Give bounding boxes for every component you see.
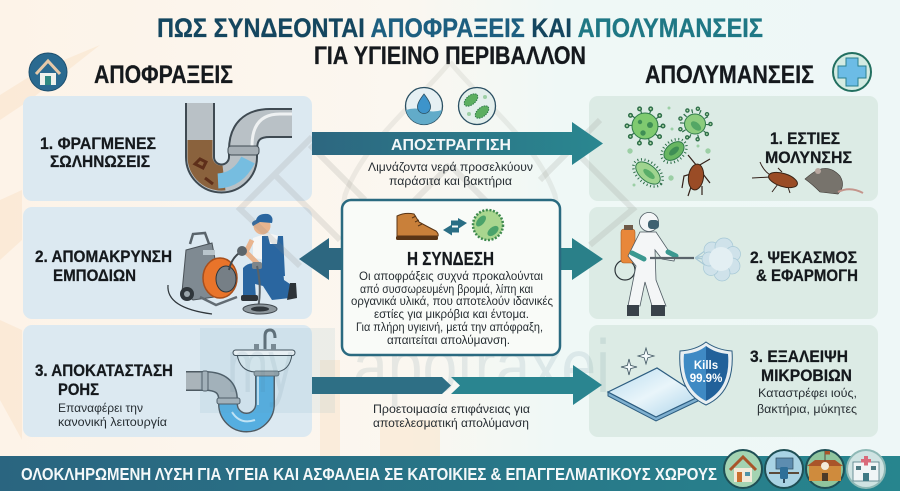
icon: microbe: [473, 210, 503, 240]
callout text: Για πλήρη υγιεινή, μετά την απόφραξη,: [356, 320, 543, 334]
icon: home: [724, 450, 762, 488]
icon: bacteria dish: [458, 88, 496, 124]
preparation caption: αποτελεσματική απολύμανση: [373, 416, 529, 430]
panel text: obstacle removal: 2. ΑΠΟΜΑΚΡΥΝΣΗ: [35, 247, 172, 266]
arrow: drainage: [312, 122, 603, 165]
callout text: εστίες για μικρόβια και έντομα.: [374, 307, 529, 321]
icon: exchange arrows: [443, 218, 467, 236]
title: ΠΩΣ ΣΥΝΔΕΟΝΤΑΙ ΑΠΟΦΡΑΞΕΙΣ ΚΑΙ ΑΠΟΛΥΜΑΝΣΕΙΣ: [157, 13, 763, 43]
panel description: microbe elimination: Καταστρέφει ιούς,: [758, 386, 857, 400]
icon: water drop: [406, 88, 442, 124]
icon: cockroach on ground: [752, 162, 799, 193]
icon: cockroach: [682, 155, 710, 196]
footer text: ΟΛΟΚΛΗΡΩΜΕΝΗ ΛΥΣΗ ΓΙΑ ΥΓΕΙΑ ΚΑΙ ΑΣΦΑΛΕΙΑ ΣΕ ΚΑΤΟΙΚΙΕΣ & ΕΠΑΓΓΕΛΜΑΤΙΚΟΥΣ ΧΩΡΟΥΣ: [21, 464, 717, 484]
panel text: flow restoration: 3. ΑΠΟΚΑΤΑΣΤΑΣΗ: [35, 361, 173, 380]
icon: shield kills 99.9%: [680, 342, 732, 405]
icon: shield kills 99.9%: 99.9%: [690, 373, 722, 385]
panel text: microbe elimination: 3. ΕΞΑΛΕΙΨΗ: [750, 347, 848, 366]
panel text: spraying: & ΕΦΑΡΜΟΓΗ: [756, 266, 858, 285]
arrow: preparation: [312, 365, 602, 405]
drainage caption: παράσιτα και βακτήρια: [389, 174, 512, 188]
watermark: my: [227, 324, 293, 408]
preparation caption: [373, 402, 530, 430]
arrow: connection to spraying: [560, 238, 603, 280]
panel text: obstacle removal: [35, 247, 172, 285]
watermark: [200, 62, 633, 413]
panel description: flow restoration: κανονική λειτουργία: [58, 415, 167, 429]
panel text: microbe elimination: ΜΙΚΡΟΒΙΩΝ: [761, 366, 852, 385]
icon: person spraying: [615, 212, 694, 316]
icon: shoe: [396, 213, 438, 240]
panel: spraying: [589, 207, 878, 319]
callout text: [351, 269, 553, 347]
icon: medical cross: [833, 53, 871, 91]
heading: right column: ΑΠΟΛΥΜΑΝΣΕΙΣ: [645, 61, 814, 89]
drainage caption: Λιμνάζοντα νερά προσελκύουν: [368, 160, 533, 174]
panel text: flow restoration: ΡΟΗΣ: [58, 380, 99, 399]
icon: office: [765, 450, 803, 488]
panel text: spraying: [750, 248, 858, 285]
panel text: blocked pipes: ΣΩΛΗΝΩΣΕΙΣ: [50, 152, 150, 171]
footer banner: [0, 450, 900, 491]
icon: clogged pipe: [195, 103, 292, 184]
callout: the connection: [342, 200, 560, 355]
panel: microbe elimination: [589, 325, 878, 437]
panel: sources of contamination: [589, 96, 878, 201]
callout text: οργανικά υλικά, που αποτελούν ιδανικές: [351, 294, 553, 308]
icon: spray cloud: [695, 238, 740, 281]
callout heading: Η ΣΥΝΔΕΣΗ: [407, 249, 494, 269]
panel: blocked pipes: [23, 96, 312, 201]
panel description: microbe elimination: βακτήρια, μύκητες: [757, 402, 857, 416]
callout text: Οι αποφράξεις συχνά προκαλούνται: [359, 269, 543, 283]
icon: drain cleaning machine: [168, 233, 245, 314]
panel text: blocked pipes: 1. ΦΡΑΓΜΕΝΕΣ: [40, 134, 156, 153]
icon: house: [29, 53, 67, 91]
icon: clean surface: [608, 348, 700, 421]
title: [157, 13, 763, 70]
icon: school: [806, 450, 844, 488]
panel text: sources of contamination: [765, 129, 852, 167]
panel: obstacle removal: [23, 207, 312, 319]
panel text: blocked pipes: [40, 134, 156, 171]
icon: shield kills 99.9%: Kills: [694, 360, 718, 372]
panel text: obstacle removal: ΕΜΠΟΔΙΩΝ: [53, 266, 136, 285]
preparation caption: Προετοιμασία επιφάνειας για: [373, 402, 530, 416]
callout text: από συσσωρευμένη βρομιά, λίπη και: [360, 282, 533, 296]
arrow: connection to obstacle removal: [299, 238, 342, 280]
title: ΓΙΑ ΥΓΙΕΙΝΟ ΠΕΡΙΒΑΛΛΟΝ: [314, 42, 586, 70]
drainage caption: [368, 160, 533, 188]
panel text: sources of contamination: 1. ΕΣΤΙΕΣ: [770, 129, 840, 148]
icon: technician: [237, 214, 297, 314]
icon: rat: [805, 168, 863, 194]
icon: germs: [627, 106, 711, 192]
panel description: microbe elimination: [757, 386, 857, 416]
callout text: απαιτείται απολύμανση.: [387, 333, 510, 347]
watermark: apotraxei: [353, 324, 610, 408]
panel description: flow restoration: Επαναφέρει την: [58, 401, 143, 415]
icon: sink with flowing pipe: [186, 330, 295, 423]
heading: left column: ΑΠΟΦΡΑΞΕΙΣ: [94, 61, 233, 89]
arrow: drainage: ΑΠΟΣΤΡΑΓΓΙΣΗ: [391, 137, 511, 154]
icon: hospital: [847, 450, 885, 488]
panel text: sources of contamination: ΜΟΛΥΝΣΗΣ: [765, 148, 852, 167]
panel text: spraying: 2. ΨΕΚΑΣΜΟΣ: [750, 248, 857, 267]
panel text: flow restoration: [35, 361, 173, 399]
panel description: flow restoration: [58, 401, 167, 429]
panel: flow restoration: [23, 325, 312, 437]
panel text: microbe elimination: [750, 347, 852, 385]
